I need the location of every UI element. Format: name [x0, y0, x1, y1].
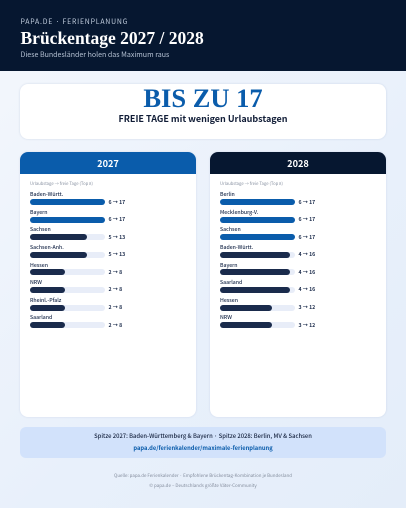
row: NRW: NRW	[220, 314, 232, 321]
panel heading 2027	[20, 152, 196, 174]
row: Rheinl.-Pfalz: Rheinl.-Pfalz	[30, 297, 61, 304]
row: Mecklenburg-V.: 6 → 17	[298, 216, 315, 223]
row: Hessen: Hessen	[30, 262, 48, 268]
row: Sachsen-Anh.: Sachsen-Anh.	[30, 244, 64, 251]
chart note: Urlaubstage → freie Tage (Top 8)	[220, 180, 283, 186]
row: Saarland	[30, 314, 122, 329]
row: Rheinl.-Pfalz: 2 → 8	[108, 304, 122, 311]
row: Bayern: Bayern	[30, 209, 48, 216]
row: Baden-Württ.	[220, 244, 315, 258]
panel: 2027	[20, 152, 196, 417]
callout	[20, 427, 386, 458]
row: NRW: NRW	[30, 279, 42, 286]
hero caption: FREIE TAGE mit wenigen Urlaubstagen	[119, 112, 287, 124]
row: Saarland: 2 → 8	[108, 322, 122, 329]
row: NRW	[30, 279, 122, 293]
row: Baden-Württ.	[30, 191, 125, 206]
row: Hessen	[30, 262, 122, 276]
row: Bayern: Bayern	[220, 262, 238, 268]
row: Hessen	[220, 297, 315, 311]
row: Mecklenburg-V.	[220, 209, 315, 223]
row: Berlin: 6 → 17	[298, 198, 315, 206]
callout summary: Spitze 2027: Baden-Württemberg & Bayern · Spitze 2028: Berlin, MV & Sachsen	[94, 431, 312, 440]
row: Rheinl.-Pfalz	[30, 297, 122, 311]
row: Bayern: 6 → 17	[108, 216, 125, 223]
row: NRW: 2 → 8	[108, 286, 122, 293]
row: Hessen: 3 → 12	[298, 304, 315, 311]
row: Baden-Württ.: 6 → 17	[108, 198, 125, 206]
source line: Quelle: papa.de Ferienkalender · Empfohlene Brückentag-Kombination je Bundesland	[114, 472, 292, 478]
row: Sachsen: 6 → 17	[298, 234, 315, 241]
row: Bayern	[220, 262, 315, 276]
row: Sachsen-Anh.	[30, 244, 125, 258]
row: NRW: 3 → 12	[298, 322, 315, 329]
panel heading 2027: 2027	[97, 156, 119, 170]
kicker: PAPA.DE · FERIENPLANUNG	[20, 16, 128, 26]
row: Sachsen: Sachsen	[30, 226, 51, 233]
row: Saarland: 4 → 16	[298, 286, 315, 293]
row: Sachsen	[220, 226, 315, 241]
row: Baden-Württ.: 4 → 16	[298, 251, 315, 258]
row: Baden-Württ.: Baden-Württ.	[220, 244, 253, 251]
row: Sachsen: Sachsen	[220, 226, 241, 233]
hero number: BIS ZU 17	[143, 82, 263, 112]
row: Bayern	[30, 209, 125, 223]
row: Sachsen: 5 → 13	[108, 234, 125, 241]
copyright line: © papa.de – Deutschlands größte Väter-Community	[149, 482, 257, 488]
callout link: papa.de/ferienkalender/maximale-ferienplanung	[133, 443, 273, 452]
chart note: Urlaubstage → freie Tage (Top 8)	[30, 180, 93, 186]
panel heading 2028: 2028	[287, 156, 309, 170]
row: Berlin: Berlin	[220, 191, 235, 198]
row: Saarland: Saarland	[220, 279, 242, 286]
row: Bayern: 4 → 16	[298, 269, 315, 276]
row: Baden-Württ.: Baden-Württ.	[30, 191, 63, 198]
subtitle: Diese Bundesländer holen das Maximum raus	[20, 50, 169, 60]
row: Hessen: Hessen	[220, 297, 238, 304]
panel heading 2028	[210, 152, 386, 174]
header band	[0, 0, 406, 71]
panel: 2028	[210, 152, 386, 417]
row: Hessen: 2 → 8	[108, 269, 122, 276]
row: Sachsen	[30, 226, 125, 241]
row: Berlin	[220, 191, 315, 206]
row: Sachsen-Anh.: 5 → 13	[108, 251, 125, 258]
hero card	[20, 84, 386, 138]
title: Brückentage 2027 / 2028	[20, 28, 204, 48]
row: Mecklenburg-V.: Mecklenburg-V.	[220, 209, 258, 216]
row: Saarland	[220, 279, 315, 293]
row: NRW	[220, 314, 315, 329]
row: Saarland: Saarland	[30, 314, 52, 321]
